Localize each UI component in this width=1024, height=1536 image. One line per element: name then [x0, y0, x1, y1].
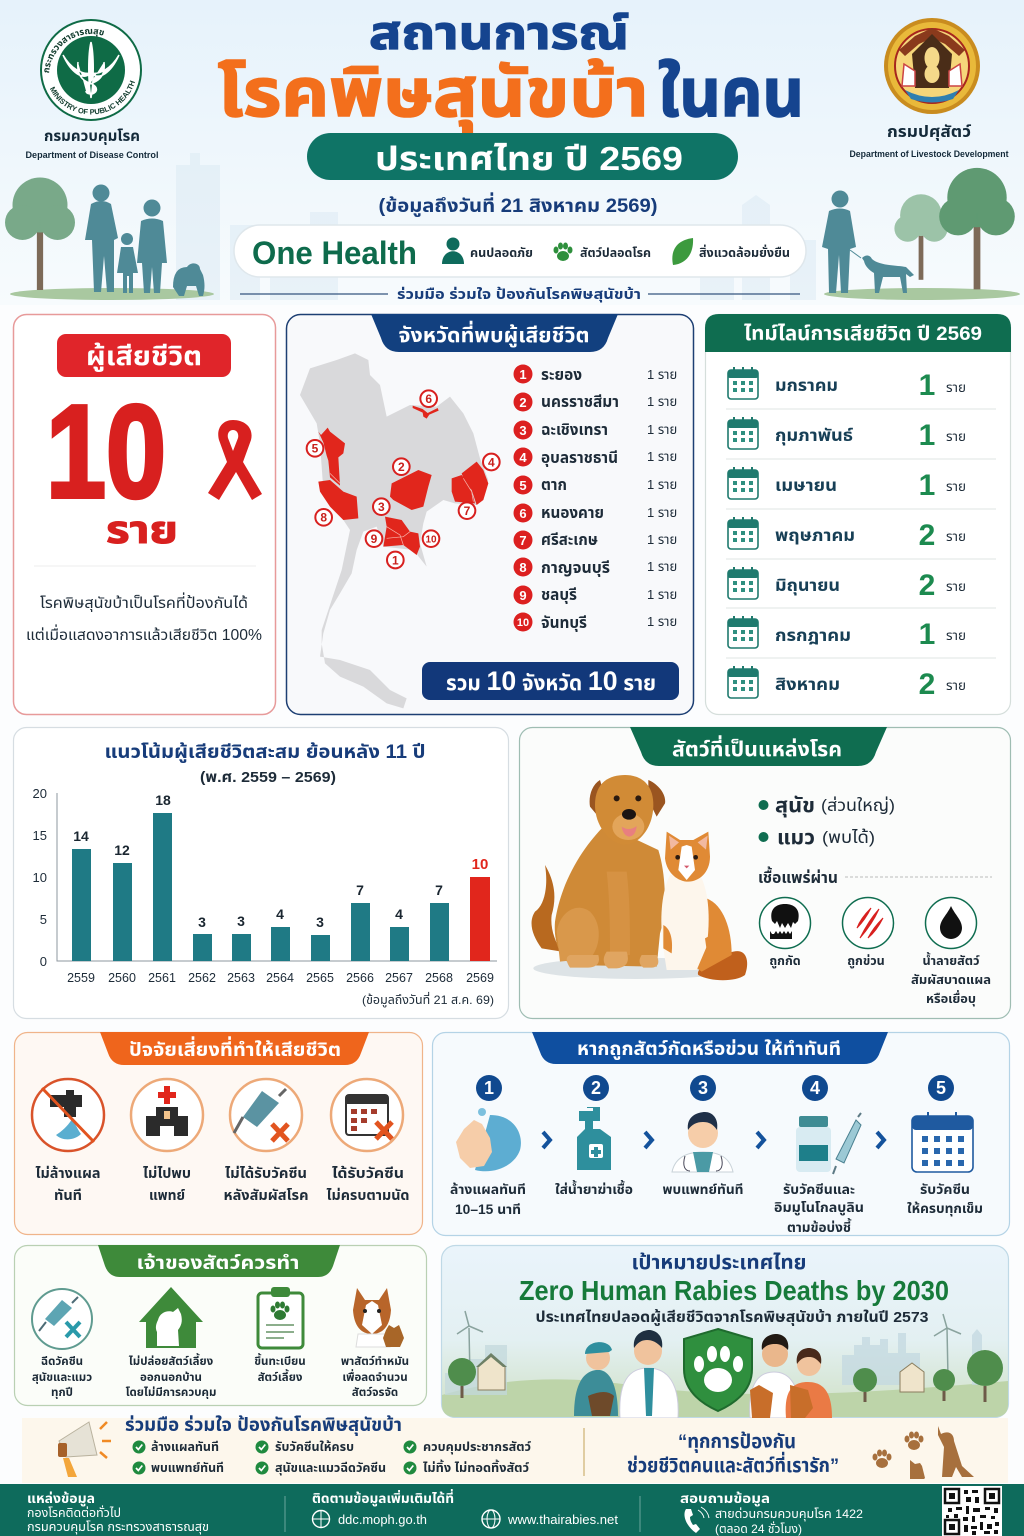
owner: do not let roam: ออกนอกบ้าน: [140, 1370, 202, 1384]
panel: pet owners: [14, 1245, 426, 1406]
icon: bite: [760, 898, 810, 969]
icon: megaphone: [58, 1422, 111, 1477]
risk: no doctor: แพทย์: [149, 1188, 185, 1204]
icon: saliva: [911, 898, 991, 1006]
counts: 1: [919, 618, 935, 651]
province list: ระยอง: [541, 367, 582, 384]
heading tab: [100, 1032, 369, 1065]
owner: neuter: สัตว์จรจัด: [352, 1385, 398, 1399]
header background: [0, 0, 1024, 305]
bar values: 3: [237, 913, 245, 929]
province list: 7: [519, 533, 527, 548]
species: แมว: [777, 827, 815, 849]
years: 2567: [385, 971, 413, 985]
heading tab: [371, 314, 618, 352]
bar values: 12: [114, 842, 130, 858]
data source: กรมควบคุมโรค กระทรวงสาธารณสุข: [27, 1520, 209, 1534]
risk: incomplete vaccine: ได้รับวัคซีน: [332, 1166, 404, 1182]
counts: 1: [919, 469, 935, 502]
heading tab: ปัจจัยเสี่ยงที่ทำให้เสียชีวิต: [129, 1036, 341, 1061]
years: 2560: [108, 971, 136, 985]
years: 2562: [188, 971, 216, 985]
step 1: [450, 1108, 526, 1217]
panel: animal sources: [520, 727, 1010, 1018]
One Health bar: สิ่งแวดล้อมยั่งยืน: [699, 244, 790, 260]
step 2: [555, 1107, 633, 1197]
icon: leaf: [672, 238, 693, 265]
step 5: [907, 1112, 983, 1217]
big number: 10: [46, 378, 166, 525]
quote: “ทุกการป้องกัน: [678, 1431, 796, 1453]
note: (ข้อมูลถึงวันที่ 21 ส.ค. 69): [362, 991, 494, 1007]
province list: จันทบุรี: [541, 615, 587, 632]
owner: do not let roam: [126, 1287, 216, 1399]
months: พฤษภาคม: [775, 526, 855, 545]
years: [67, 971, 494, 985]
months: เมษายน: [775, 476, 837, 495]
owner: neuter: [341, 1288, 409, 1399]
units: ราย: [946, 429, 966, 444]
bar values: 10: [472, 856, 488, 873]
province list: [514, 364, 677, 632]
title: สถานการณ์: [369, 7, 629, 59]
data date: (ข้อมูลถึงวันที่ 21 สิงหาคม 2569): [378, 192, 658, 217]
contact: (ตลอด 24 ชั่วโมง): [715, 1521, 802, 1536]
province list: 1 ราย: [647, 449, 677, 464]
years: 2565: [306, 971, 334, 985]
step 4: [774, 1113, 864, 1235]
months: [775, 376, 855, 694]
department name left: Department of Disease Control: [26, 150, 158, 161]
total: [422, 662, 679, 700]
owner: neuter: เพื่อลดจำนวน: [342, 1369, 408, 1384]
species: (ส่วนใหญ่): [821, 796, 895, 815]
logo: Department of Disease Control: กระทรวงสาธารณสุข: [44, 28, 104, 73]
map of Thailand: 10: [425, 534, 437, 545]
province list: ตาก: [541, 477, 567, 494]
department name left: [26, 128, 158, 161]
province list: 2: [519, 395, 527, 410]
risk: no wound washing: ทันที: [54, 1188, 82, 1204]
species: สุนัข: [775, 795, 815, 817]
province list: 9: [519, 588, 527, 603]
bar values: 7: [356, 882, 364, 898]
months: กุมภาพันธ์: [775, 426, 853, 446]
total: รวม 10 จังหวัด 10 ราย: [446, 666, 656, 696]
icon: saliva: สัมผัสบาดแผล: [911, 973, 991, 987]
panel: bar chart: [14, 728, 508, 1018]
logo: Department of Disease Control: MINISTRY OF PUBLIC HEALTH: [50, 80, 135, 114]
panel: timeline: [705, 314, 1011, 714]
illustration: people and shield: [442, 1311, 1008, 1418]
units: ราย: [946, 678, 966, 693]
province list: 1 ราย: [647, 394, 677, 409]
bar values: 3: [316, 914, 324, 930]
map of Thailand: 8: [320, 511, 327, 525]
map of Thailand: 1: [392, 553, 399, 567]
months: สิงหาคม: [775, 675, 840, 694]
heading tab: [98, 1245, 340, 1277]
step 4: ตามข้อบ่งชี้: [787, 1218, 852, 1235]
logo: Department of Disease Control: [40, 19, 142, 121]
heading tab: หากถูกสัตว์กัดหรือข่วน ให้ทำทันที: [577, 1038, 841, 1060]
heading tab: [532, 1032, 888, 1064]
province list: 10: [517, 617, 529, 629]
footer: [0, 1484, 1024, 1536]
step 1: 10–15 นาที: [455, 1202, 521, 1217]
arrows: [543, 1132, 884, 1148]
more information: ddc.moph.go.th: [338, 1512, 427, 1527]
department name right: [850, 124, 1009, 160]
owner: vaccinate: สุนัขและแมว: [32, 1371, 92, 1384]
contact: สายด่วนกรมควบคุมโรค 1422: [715, 1507, 863, 1521]
province list: ศรีสะเกษ: [541, 532, 598, 549]
risk: no doctor: [131, 1079, 203, 1204]
panel: first aid steps: [432, 1032, 1010, 1236]
chart title: (พ.ศ. 2559 – 2569): [200, 769, 336, 786]
y axis: 10: [33, 870, 47, 885]
QR code: [942, 1486, 1002, 1536]
map of Thailand: 4: [488, 455, 495, 469]
heading tab: สัตว์ที่เป็นแหล่งโรค: [672, 735, 842, 761]
icon: paw: [554, 242, 572, 261]
map of Thailand: 2: [398, 460, 405, 474]
province list: 1 ราย: [647, 532, 677, 547]
province list: 1 ราย: [647, 587, 677, 602]
One Health bar: สัตว์ปลอดโรค: [580, 246, 651, 260]
units: ราย: [946, 479, 966, 494]
owner: vaccinate: ทุกปี: [51, 1386, 73, 1399]
One Health bar: คนปลอดภัย: [470, 246, 533, 260]
years: 2559: [67, 971, 95, 985]
transmission heading: เชื้อแพร่ผ่าน: [758, 866, 838, 887]
owner: do not let roam: โดยไม่มีการควบคุม: [126, 1385, 216, 1399]
subtitle pill: [307, 133, 738, 180]
province list: 4: [519, 450, 527, 465]
province list: 1 ราย: [647, 614, 677, 629]
province list: อุบลราชธานี: [541, 450, 618, 467]
unit: ราย: [106, 510, 178, 552]
months: มิถุนายน: [775, 576, 840, 596]
description: แต่เมื่อแสดงอาการแล้วเสียชีวิต 100%: [26, 624, 262, 644]
map of Thailand: 9: [371, 532, 378, 546]
years: 2569: [466, 971, 494, 985]
years: 2561: [148, 971, 176, 985]
units: ราย: [946, 529, 966, 544]
goal heading: เป้าหมายประเทศไทย: [632, 1252, 806, 1274]
heading pill: [57, 334, 231, 377]
province list: หนองคาย: [541, 505, 604, 522]
units: [946, 380, 966, 693]
owner: do not let roam: ไม่ปล่อยสัตว์เลี้ยง: [129, 1353, 214, 1368]
step 1: ล้างแผลทันที: [450, 1182, 526, 1197]
checklist: สุนัขและแมวฉีดวัคซีน: [275, 1461, 386, 1475]
years: 2568: [425, 971, 453, 985]
icon: saliva: น้ำลายสัตว์: [922, 952, 980, 968]
owner: vaccinate: [32, 1289, 92, 1399]
checklist: พบแพทย์ทันที: [151, 1461, 224, 1475]
months: กรกฎาคม: [775, 626, 851, 645]
data source: [27, 1490, 209, 1534]
panel: provinces map: [286, 314, 694, 714]
One Health bar: One Health: [252, 235, 417, 271]
quote: [627, 1431, 839, 1477]
step 4: รับวัคซีนและ: [783, 1182, 855, 1197]
title: โรคพิษสุนัขบ้า: [218, 55, 648, 134]
owner: register: ขึ้นทะเบียน: [254, 1353, 306, 1368]
counts: [919, 369, 935, 701]
icon: scratch: ถูกข่วน: [847, 954, 885, 969]
owner: register: [254, 1287, 306, 1384]
goal statement: Zero Human Rabies Deaths by 2030: [519, 1275, 949, 1306]
province list: 1 ราย: [647, 559, 677, 574]
step numbers: 5: [936, 1078, 946, 1098]
step 3: [662, 1112, 744, 1197]
province list: 1 ราย: [647, 422, 677, 437]
department name left: กรมควบคุมโรค: [44, 128, 140, 145]
heading tab: [630, 727, 887, 766]
owner: neuter: พาสัตว์ทำหมัน: [341, 1354, 409, 1368]
map of Thailand: [300, 353, 500, 708]
province list: นครราชสีมา: [541, 394, 619, 411]
risk: no wound washing: ไม่ล้างแผล: [36, 1165, 100, 1182]
y axis: 20: [33, 786, 47, 801]
goal detail: ประเทศไทยปลอดผู้เสียชีวิตจากโรคพิษสุนัขบ้า ภายในปี 2573: [536, 1308, 928, 1327]
heading tab: จังหวัดที่พบผู้เสียชีวิต: [398, 320, 590, 348]
owner: vaccinate: ฉีดวัคซีน: [41, 1355, 83, 1368]
province list: 8: [519, 560, 527, 575]
illustration: dog and cat: [532, 775, 747, 980]
province list: 6: [519, 506, 527, 521]
province list: 1 ราย: [647, 505, 677, 520]
counts: 2: [919, 519, 935, 552]
checklist: ไม่ทิ้ง ไม่ทอดทิ้งสัตว์: [423, 1460, 529, 1475]
province list: 1: [519, 367, 527, 382]
data source: แหล่งข้อมูล: [27, 1490, 95, 1508]
province list: 3: [519, 423, 527, 438]
icon: ribbon: [208, 420, 262, 500]
heading: ไทม์ไลน์การเสียชีวิต ปี 2569: [744, 323, 982, 345]
panel: risk factors: [14, 1032, 422, 1234]
department name right: Department of Livestock Development: [850, 149, 1009, 160]
step numbers: 4: [810, 1078, 820, 1098]
risk: no wound washing: [32, 1079, 104, 1204]
bars: [72, 813, 490, 961]
risk: no vaccine after exposure: [224, 1079, 308, 1204]
years: 2564: [266, 971, 294, 985]
description: โรคพิษสุนัขบ้าเป็นโรคที่ป้องกันได้: [40, 592, 248, 612]
department name right: กรมปศุสัตว์: [887, 124, 971, 141]
counts: 1: [919, 419, 935, 452]
contact: [680, 1491, 863, 1536]
icon: scratch: [842, 898, 894, 969]
province list: ฉะเชิงเทรา: [541, 422, 608, 439]
step 2: ใส่น้ำยาฆ่าเชื้อ: [555, 1180, 633, 1197]
checklist: ล้างแผลทันที: [151, 1440, 219, 1454]
years: 2563: [227, 971, 255, 985]
step numbers: [476, 1075, 954, 1101]
y axis: 15: [33, 828, 47, 843]
chart title: แนวโน้มผู้เสียชีวิตสะสม ย้อนหลัง 11 ปี: [104, 741, 426, 763]
map of Thailand: 7: [464, 504, 471, 518]
counts: 1: [919, 369, 935, 402]
checklist: รับวัคซีนให้ครบ: [275, 1440, 354, 1454]
calendar icons: [728, 367, 758, 698]
heading pill: ผู้เสียชีวิต: [86, 341, 202, 372]
y axis: 0: [40, 954, 47, 969]
title: ในคน: [658, 55, 804, 131]
months: มกราคม: [775, 376, 838, 395]
province list: 1 ราย: [647, 367, 677, 382]
province list: 1 ราย: [647, 477, 677, 492]
heading tab: เจ้าของสัตว์ควรทำ: [136, 1252, 300, 1274]
bar values: 7: [435, 882, 443, 898]
province list: กาญจนบุรี: [541, 560, 610, 577]
step 5: รับวัคซีน: [920, 1182, 970, 1197]
step numbers: 2: [591, 1078, 601, 1098]
species: [758, 795, 895, 849]
map of Thailand: 6: [425, 392, 432, 406]
title: [218, 7, 804, 134]
logo: Department of Livestock Development: [884, 18, 980, 114]
bar values: 4: [276, 906, 284, 922]
panel: goal: [442, 1246, 1008, 1418]
risk: no vaccine after exposure: หลังสัมผัสโรค: [224, 1188, 308, 1204]
contact: สอบถามข้อมูล: [680, 1491, 770, 1508]
step 3: พบแพทย์ทันที: [662, 1182, 744, 1197]
units: ราย: [946, 380, 966, 395]
bar values: [73, 792, 488, 930]
map of Thailand: 5: [312, 442, 319, 456]
units: ราย: [946, 628, 966, 643]
province list: 5: [519, 478, 527, 493]
more information: [312, 1489, 618, 1528]
One Health bar: [234, 225, 806, 277]
illustration: paws and pets: [872, 1426, 974, 1479]
step 4: อิมมูโนโกลบูลิน: [774, 1200, 864, 1217]
call to action heading: ร่วมมือ ร่วมใจ ป้องกันโรคพิษสุนัขบ้า: [125, 1414, 402, 1436]
more information: www.thairabies.net: [507, 1512, 618, 1527]
counts: 2: [919, 668, 935, 701]
bar values: 14: [73, 828, 89, 844]
panel: deaths: [14, 314, 276, 714]
y axis: [33, 786, 47, 969]
risk: no vaccine after exposure: ไม่ได้รับวัคซีน: [225, 1165, 307, 1182]
heading: [705, 314, 1011, 352]
bar values: 18: [155, 792, 171, 808]
illustration: woman walking dog with trees: [822, 168, 1020, 300]
subtitle pill: ประเทศไทย ปี 2569: [375, 140, 683, 177]
quote: ช่วยชีวิตคนและสัตว์ที่เรารัก”: [627, 1451, 839, 1477]
risk: no doctor: ไม่ไปพบ: [143, 1165, 191, 1182]
icon: person: [442, 238, 464, 264]
y axis: 5: [40, 912, 47, 927]
icon: saliva: หรือเยื่อบุ: [926, 990, 976, 1006]
years: 2566: [346, 971, 374, 985]
more information: ติดตามข้อมูลเพิ่มเติมได้ที่: [312, 1489, 454, 1508]
map of Thailand: 3: [378, 500, 385, 514]
bar values: 3: [198, 914, 206, 930]
step 5: ให้ครบทุกเข็ม: [907, 1201, 983, 1217]
risk: incomplete vaccine: ไม่ครบตามนัด: [326, 1187, 410, 1204]
owner: register: สัตว์เลี้ยง: [258, 1369, 303, 1384]
species: (พบได้): [822, 827, 875, 847]
chart title: [104, 741, 426, 786]
illustration: family with dog: [5, 178, 214, 300]
risk: incomplete vaccine: [326, 1079, 410, 1204]
description: [26, 592, 262, 644]
tagline: ร่วมมือ ร่วมใจ ป้องกันโรคพิษสุนัขบ้า: [397, 286, 641, 303]
checklist: [132, 1440, 531, 1475]
bar values: 4: [395, 906, 403, 922]
data source: กองโรคติดต่อทั่วไป: [27, 1505, 121, 1520]
step numbers: 3: [698, 1078, 708, 1098]
step numbers: 1: [484, 1078, 494, 1098]
icon: bite: ถูกกัด: [769, 954, 801, 969]
counts: 2: [919, 569, 935, 602]
province list: ชลบุรี: [541, 587, 577, 604]
checklist: ควบคุมประชากรสัตว์: [423, 1440, 531, 1454]
units: ราย: [946, 579, 966, 594]
panel: call to action strip: [22, 1414, 1008, 1483]
